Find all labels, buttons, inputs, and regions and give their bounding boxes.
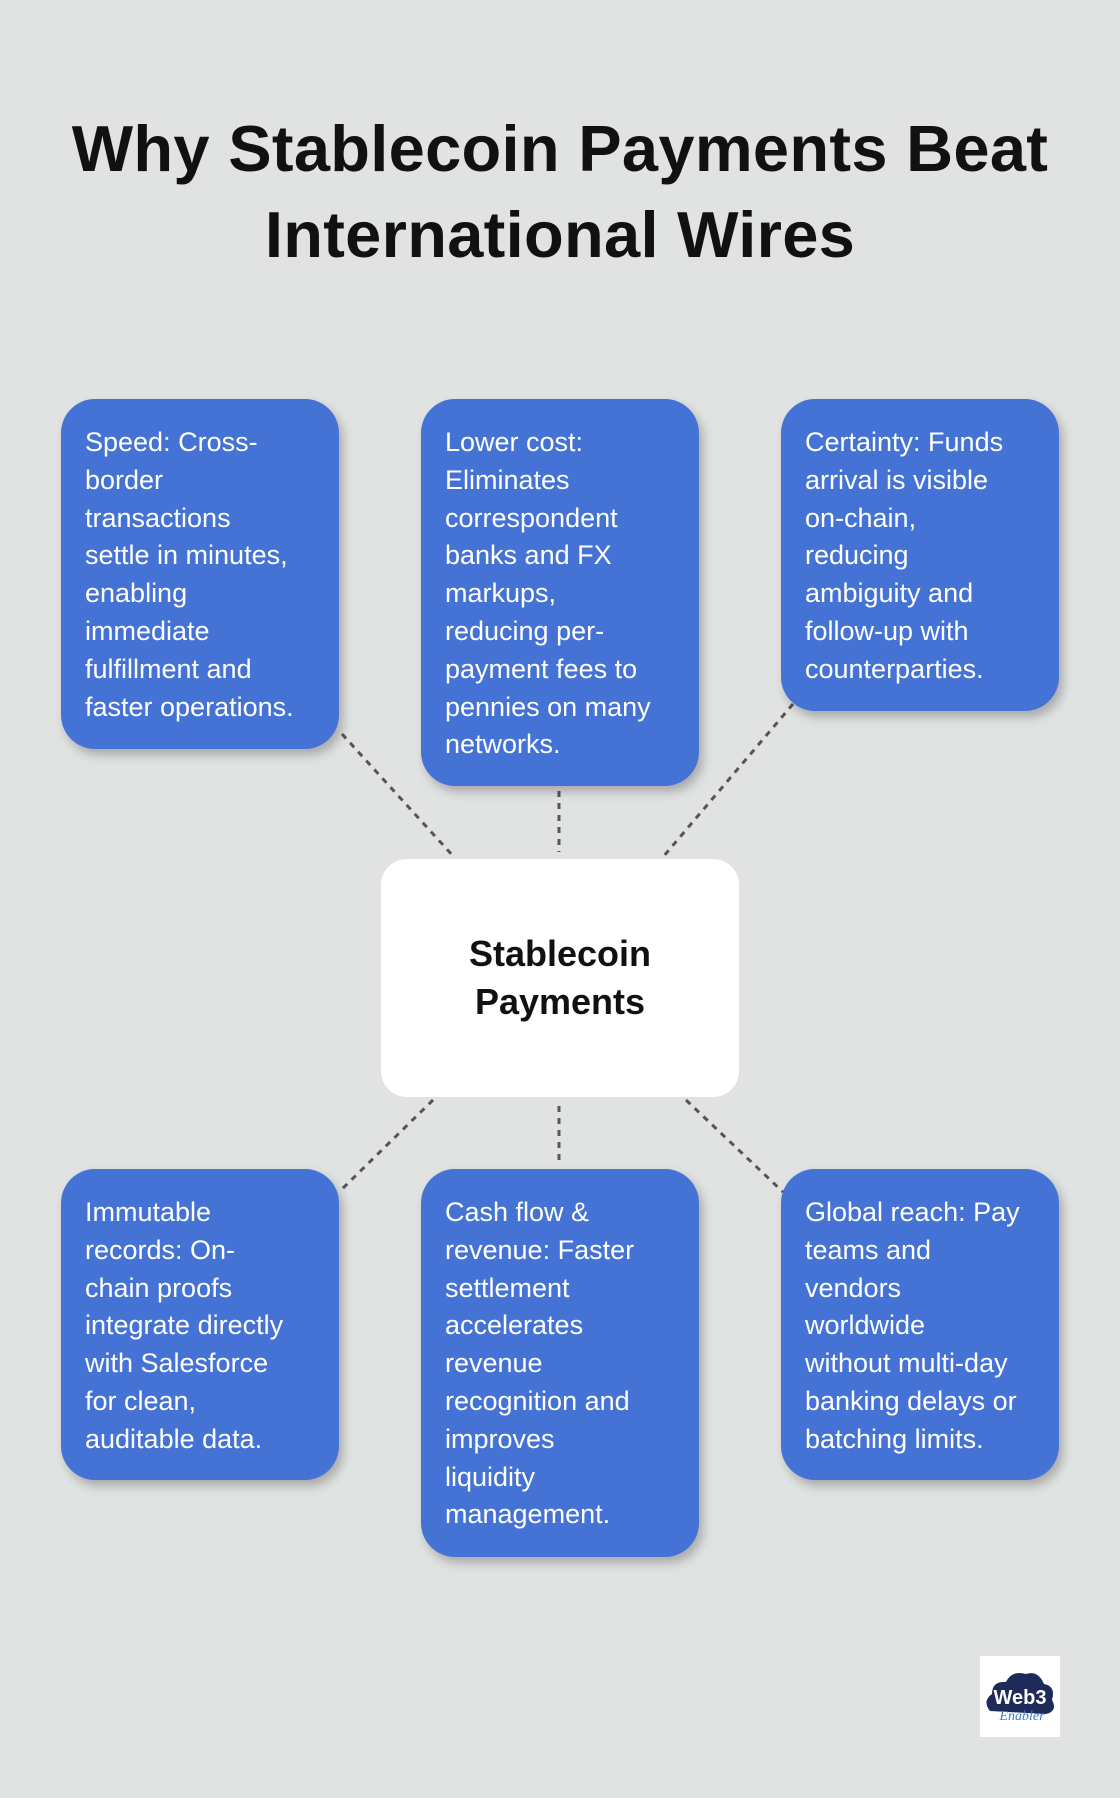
box: global reach: Global reach: Pay bbox=[805, 1197, 1020, 1227]
box: immutable records bbox=[61, 1169, 339, 1480]
center node: Payments bbox=[475, 981, 645, 1022]
box: global reach bbox=[781, 1169, 1059, 1480]
box: speed bbox=[61, 399, 339, 749]
box: cash flow: improves bbox=[445, 1424, 555, 1454]
box: cash flow: Cash flow & bbox=[445, 1197, 589, 1227]
box: lower cost: Eliminates bbox=[445, 465, 570, 495]
box: speed: Speed: Cross- bbox=[85, 427, 258, 457]
box: speed: enabling bbox=[85, 578, 187, 608]
box: lower cost: networks. bbox=[445, 729, 561, 759]
title: International Wires bbox=[265, 198, 855, 271]
box: immutable records: auditable data. bbox=[85, 1424, 262, 1454]
title: Why Stablecoin Payments Beat bbox=[72, 112, 1048, 185]
center node bbox=[381, 859, 739, 1097]
box: certainty: reducing bbox=[805, 540, 909, 570]
box: certainty: counterparties. bbox=[805, 654, 984, 684]
logo: Enabler bbox=[998, 1709, 1045, 1724]
box: lower cost: reducing per- bbox=[445, 616, 604, 646]
box: immutable records: for clean, bbox=[85, 1386, 196, 1416]
box: speed: transactions bbox=[85, 503, 231, 533]
title bbox=[72, 112, 1048, 271]
box: immutable records: chain proofs bbox=[85, 1273, 232, 1303]
box: certainty: on-chain, bbox=[805, 503, 916, 533]
box: certainty bbox=[781, 399, 1059, 711]
box: certainty: follow-up with bbox=[805, 616, 969, 646]
box: global reach: vendors bbox=[805, 1273, 901, 1303]
box: cash flow: liquidity bbox=[445, 1462, 535, 1492]
box: global reach: worldwide bbox=[805, 1310, 925, 1340]
box: immutable records: records: On- bbox=[85, 1235, 235, 1265]
box: global reach: batching limits. bbox=[805, 1424, 984, 1454]
box: cash flow: revenue bbox=[445, 1348, 543, 1378]
box: immutable records: Immutable bbox=[85, 1197, 211, 1227]
box: cash flow: recognition and bbox=[445, 1386, 630, 1416]
box: global reach: without multi-day bbox=[805, 1348, 1008, 1378]
box: certainty: ambiguity and bbox=[805, 578, 973, 608]
box: certainty: arrival is visible bbox=[805, 465, 988, 495]
box: immutable records: integrate directly bbox=[85, 1310, 283, 1340]
box: lower cost: Lower cost: bbox=[445, 427, 583, 457]
box: cash flow: accelerates bbox=[445, 1310, 583, 1340]
box: global reach: teams and bbox=[805, 1235, 931, 1265]
box: speed: settle in minutes, bbox=[85, 540, 288, 570]
box: lower cost: markups, bbox=[445, 578, 556, 608]
box: speed: immediate bbox=[85, 616, 210, 646]
center node: Stablecoin bbox=[469, 933, 651, 974]
box: lower cost: banks and FX bbox=[445, 540, 612, 570]
logo: Web3 bbox=[994, 1687, 1046, 1709]
box: speed: border bbox=[85, 465, 163, 495]
box: cash flow bbox=[421, 1169, 699, 1557]
box: speed: faster operations. bbox=[85, 692, 294, 722]
box: cash flow: revenue: Faster bbox=[445, 1235, 634, 1265]
box: lower cost bbox=[421, 399, 699, 786]
box: certainty: Certainty: Funds bbox=[805, 427, 1003, 457]
box: lower cost: correspondent bbox=[445, 503, 618, 533]
box: immutable records: with Salesforce bbox=[85, 1348, 268, 1378]
box: lower cost: payment fees to bbox=[445, 654, 637, 684]
box: cash flow: management. bbox=[445, 1499, 610, 1529]
box: speed: fulfillment and bbox=[85, 654, 252, 684]
box: lower cost: pennies on many bbox=[445, 692, 651, 722]
logo bbox=[980, 1656, 1060, 1737]
box: global reach: banking delays or bbox=[805, 1386, 1017, 1416]
box: cash flow: settlement bbox=[445, 1273, 570, 1303]
